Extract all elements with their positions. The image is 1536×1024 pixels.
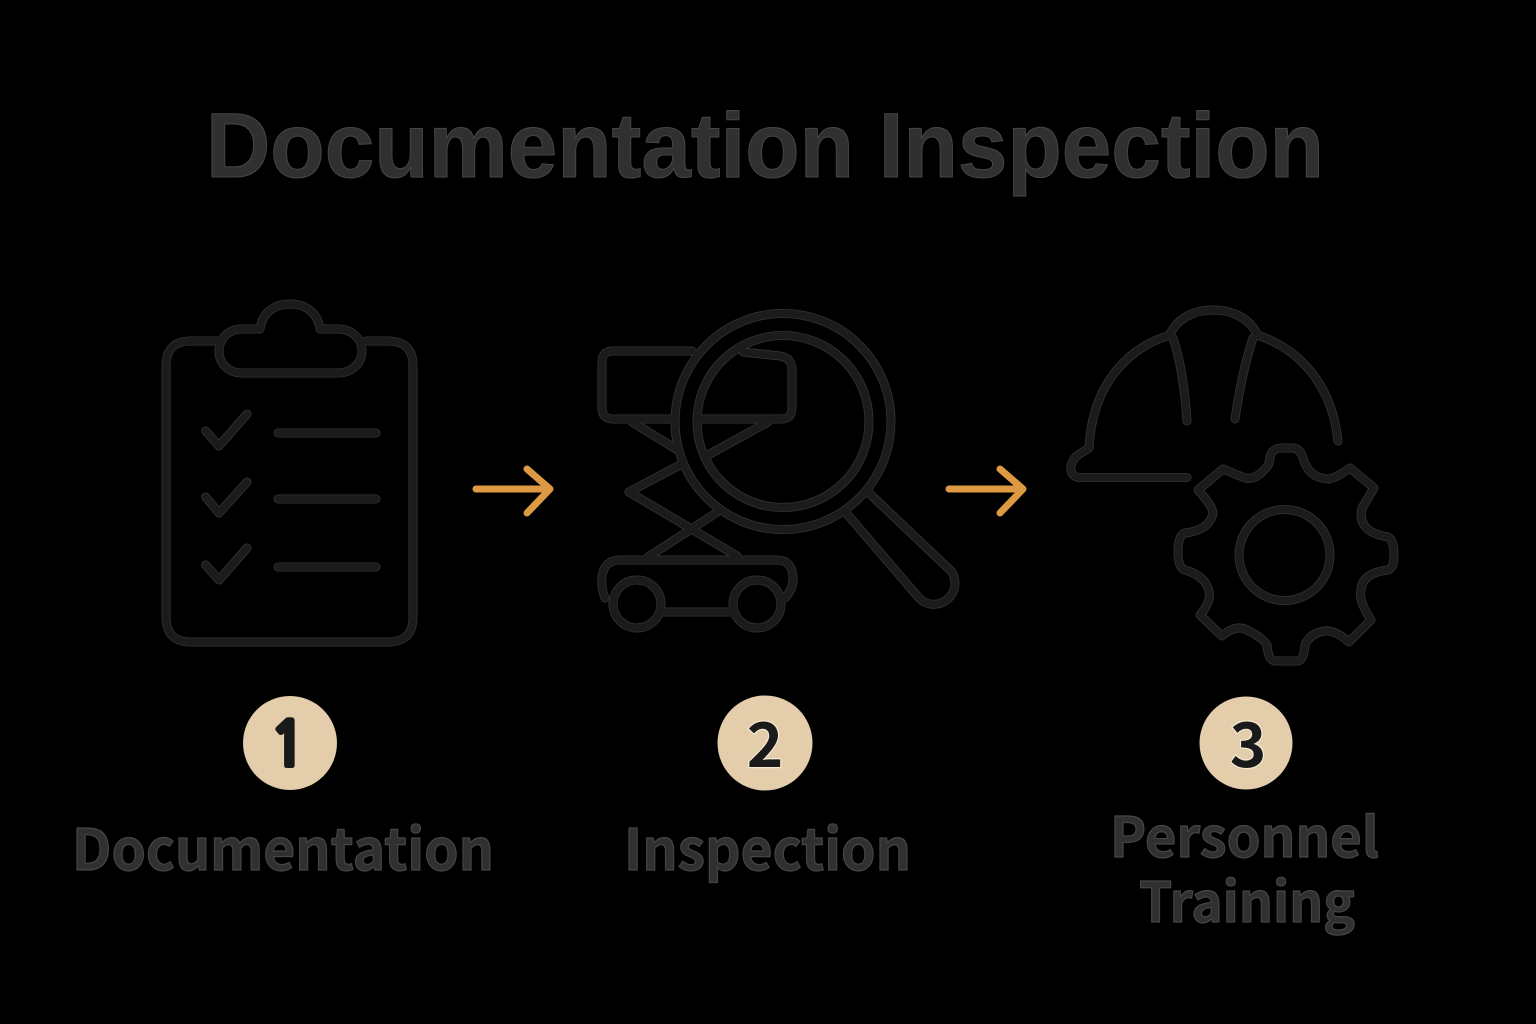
icon: scissor lift under magnifying glass [602, 314, 955, 628]
step 2 badge [718, 695, 812, 790]
step 2 label: Inspection [624, 805, 911, 887]
arrow: step 1 to step 2 [476, 469, 550, 513]
step 3 badge: 3 [1230, 695, 1266, 785]
step 1 badge [243, 696, 337, 790]
icon: clipboard checklist [166, 304, 413, 642]
step 2 badge: 2 [747, 695, 783, 785]
step 3 badge [1200, 695, 1292, 790]
step 3 label: Personnel [1110, 793, 1379, 873]
arrow: step 2 to step 3 [949, 469, 1023, 513]
step 3 label: Training [1139, 858, 1355, 938]
title: Documentation Inspection [206, 95, 1324, 197]
step 1 badge: 1 [270, 716, 306, 776]
icon: hard hat and gear [1071, 310, 1394, 661]
step 1 label: Documentation [72, 805, 494, 887]
step 3 label [1110, 793, 1379, 938]
